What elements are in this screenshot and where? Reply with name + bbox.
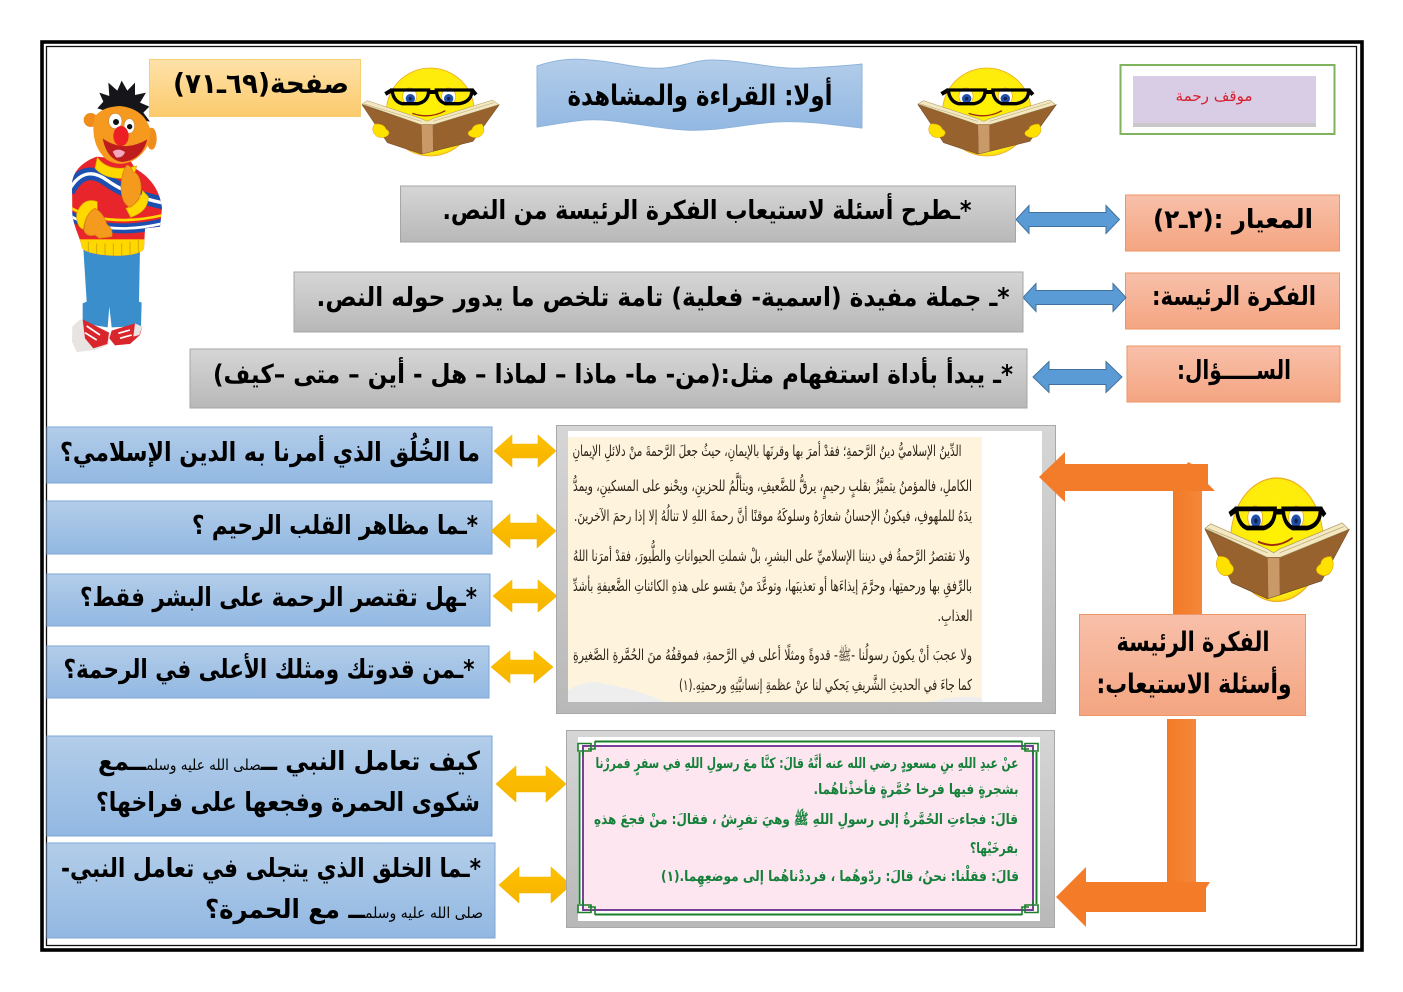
box: standard label xyxy=(1126,195,1340,251)
page reference box xyxy=(150,60,360,116)
hadith text: عنْ عبدِ اللهِ بنِ مسعودٍ رضي الله عنه أنَّهُ قالَ: كنَّا معَ رسولِ اللهِ في سفرٍ فمررْنا xyxy=(596,753,1018,776)
hadith text: بشجرةٍ فيها فرخا حُمَّرةٍ فأخذْناهُما. xyxy=(814,780,1018,799)
box: standard text: *ـطرح أسئلة لاستيعاب الفكرة الرئيسة من النص. xyxy=(442,193,972,226)
hair xyxy=(97,81,150,122)
head xyxy=(84,106,157,164)
arrow: orange to hadith xyxy=(1056,719,1210,927)
lesson title box: موقف رحمة xyxy=(1176,87,1252,105)
panel: textbook passage xyxy=(556,426,1056,714)
arrow: yellow 2 xyxy=(491,514,556,548)
cuffs xyxy=(77,191,148,229)
box: main idea and comprehension questions xyxy=(1080,614,1306,716)
question box 6: صلى الله عليه وسلمــ مع الحمرة؟ xyxy=(205,895,483,925)
box: main idea label xyxy=(1126,273,1340,329)
arrow: yellow 4 xyxy=(491,651,553,683)
lesson title box xyxy=(1120,65,1334,134)
question box 3 xyxy=(47,574,490,626)
arrow: yellow 3 xyxy=(493,580,557,612)
hands xyxy=(84,165,141,238)
arrow: double blue xyxy=(1016,206,1120,234)
question box 2: *ـما مظاهر القلب الرحيم ؟ xyxy=(192,511,478,541)
question box 5: كيف تعامل النبي ــصلى الله عليه وسلمــمع xyxy=(98,747,481,777)
passage text: الدِّينُ الإسلاميُّ دينُ الرَّحمةِ؛ فقدْ أمرَ بها وقرنَها بالإيمانِ، حيثُ جعلَ الرَّحمةَ منْ دلائلِ الإيمانِ xyxy=(572,441,962,462)
question box 5: شكوى الحمرة وفجعها على فراخها؟ xyxy=(96,788,480,818)
box: main idea label: الفكرة الرئيسة: xyxy=(1152,282,1316,312)
arrow: yellow 5 xyxy=(496,766,566,802)
sweater xyxy=(72,156,162,256)
question box 5 xyxy=(47,736,492,836)
box: question text xyxy=(190,349,1027,408)
panel: hadith xyxy=(566,730,1054,928)
question box 4 xyxy=(47,646,489,698)
box: question text: *ـ يبدأ بأداة استفهام مثل:(من- ما- ماذا – لماذا – هل - أين – متى –كيف) xyxy=(213,357,1013,390)
hadith text: قالَ: فجاءتِ الحُمَّرةُ إلى رسولِ اللهِ ﷺ وهيَ تفرِشُ ، فقالَ: منْ فجعَ هذهِ xyxy=(594,808,1018,830)
title banner: أولا: القراءة والمشاهدة xyxy=(568,77,832,112)
icon: reader center xyxy=(918,68,1056,156)
icon: reader right xyxy=(1205,478,1349,601)
question box 4: *ـمن قدوتك ومثلك الأعلى في الرحمة؟ xyxy=(64,653,475,685)
passage text: الكاملِ، فالمؤمنُ يتميَّزُ بقلبٍ رحيمٍ، يرقُّ للضَّعيفِ، ويتألَّمُ للحزينِ، ويحْنو على المسكينِ، ويمدُّ xyxy=(573,473,972,499)
passage text xyxy=(572,441,973,695)
box: standard text xyxy=(400,186,1016,242)
box: main idea text xyxy=(294,272,1023,332)
shoes xyxy=(72,319,142,352)
collar xyxy=(95,157,137,178)
question box 1: ما الخُلُق الذي أمرنا به الدين الإسلامي؟ xyxy=(60,432,480,468)
question box 6: *ـما الخلق الذي يتجلى في تعامل النبي- xyxy=(61,854,481,884)
question box 3: *ـهل تقتصر الرحمة على البشر فقط؟ xyxy=(80,583,477,613)
passage text: ولا عجبَ أنْ يكونَ رسولُنا -ﷺ- قدوةً ومثلًا أعلى في الرَّحمةِ، فموقفُهُ منَ الحُمَّرةِ الصَّغيرةِ xyxy=(573,644,972,665)
question box 6 xyxy=(47,843,495,938)
passage text: ولا تقتصرُ الرَّحمةُ في ديننا الإسلاميِّ على البشرِ، بلْ شملتِ الحيواناتِ والطُّيورَ، فقدْ أمرَنا اللهُ xyxy=(573,540,970,568)
box: question label: الســـــؤال: xyxy=(1177,356,1291,386)
box: main idea and comprehension questions: الفكرة الرئيسة xyxy=(1116,627,1270,658)
page reference box: صفحة(٦٩ـ٧١) xyxy=(173,67,349,100)
standard row xyxy=(400,186,1340,251)
jeans xyxy=(83,248,142,327)
title banner xyxy=(537,59,862,130)
main idea row xyxy=(294,272,1340,332)
hadith text xyxy=(594,753,1019,887)
hadith frame xyxy=(578,741,1038,915)
icon: reader left xyxy=(362,68,499,156)
character: Ernie xyxy=(68,81,165,352)
passage text: بالرِّفقِ بها ورحمتِها، وحرَّمَ إيذاءَها أو تعذيبَها، وتوعَّدَ منْ يقسو على هذهِ الكائناتِ الضَّعيفةِ بأشدِّ xyxy=(573,575,972,598)
arrow: yellow 6 xyxy=(499,867,571,903)
arrow: double blue xyxy=(1023,284,1126,312)
question box 1 xyxy=(47,427,492,483)
box: main idea text: *ـ جملة مفيدة (اسمية- فعلية) تامة تلخص ما يدور حوله النص. xyxy=(316,283,1010,313)
arrow: yellow 1 xyxy=(494,435,556,467)
passage text: كما جاءَ في الحديثِ الشَّريفِ يَحكي لنا عنْ عظمةِ إنسانيَّتِهِ ورحمتِهِ.(١) xyxy=(679,675,973,695)
box: standard label: المعيار :(٢ـ٢) xyxy=(1153,205,1313,235)
box: question label xyxy=(1127,346,1340,402)
box: main idea and comprehension questions: وأسئلة الاستيعاب: xyxy=(1096,666,1292,700)
hadith text: بفرخَيْها؟ xyxy=(970,841,1018,857)
question box 2 xyxy=(47,501,492,554)
question row xyxy=(190,346,1340,408)
hadith text: قالَ: فقلْنا: نحنُ، قالَ: ردّوهُما ، فرددْناهُما إلى موضعِهِما.(١) xyxy=(661,865,1019,887)
arrow: double blue xyxy=(1033,362,1122,392)
passage text: يدَهُ للملهوفِ، فيكونُ الإحسانُ شعارَهُ وسلوكَهُ موقنًا أنَّ رحمةَ اللهِ لا تنالُهُ إلا إذا رحمَ الآخرينَ. xyxy=(574,505,972,525)
arrow: orange to passage xyxy=(1039,452,1215,615)
passage text: العذابِ. xyxy=(938,607,972,627)
